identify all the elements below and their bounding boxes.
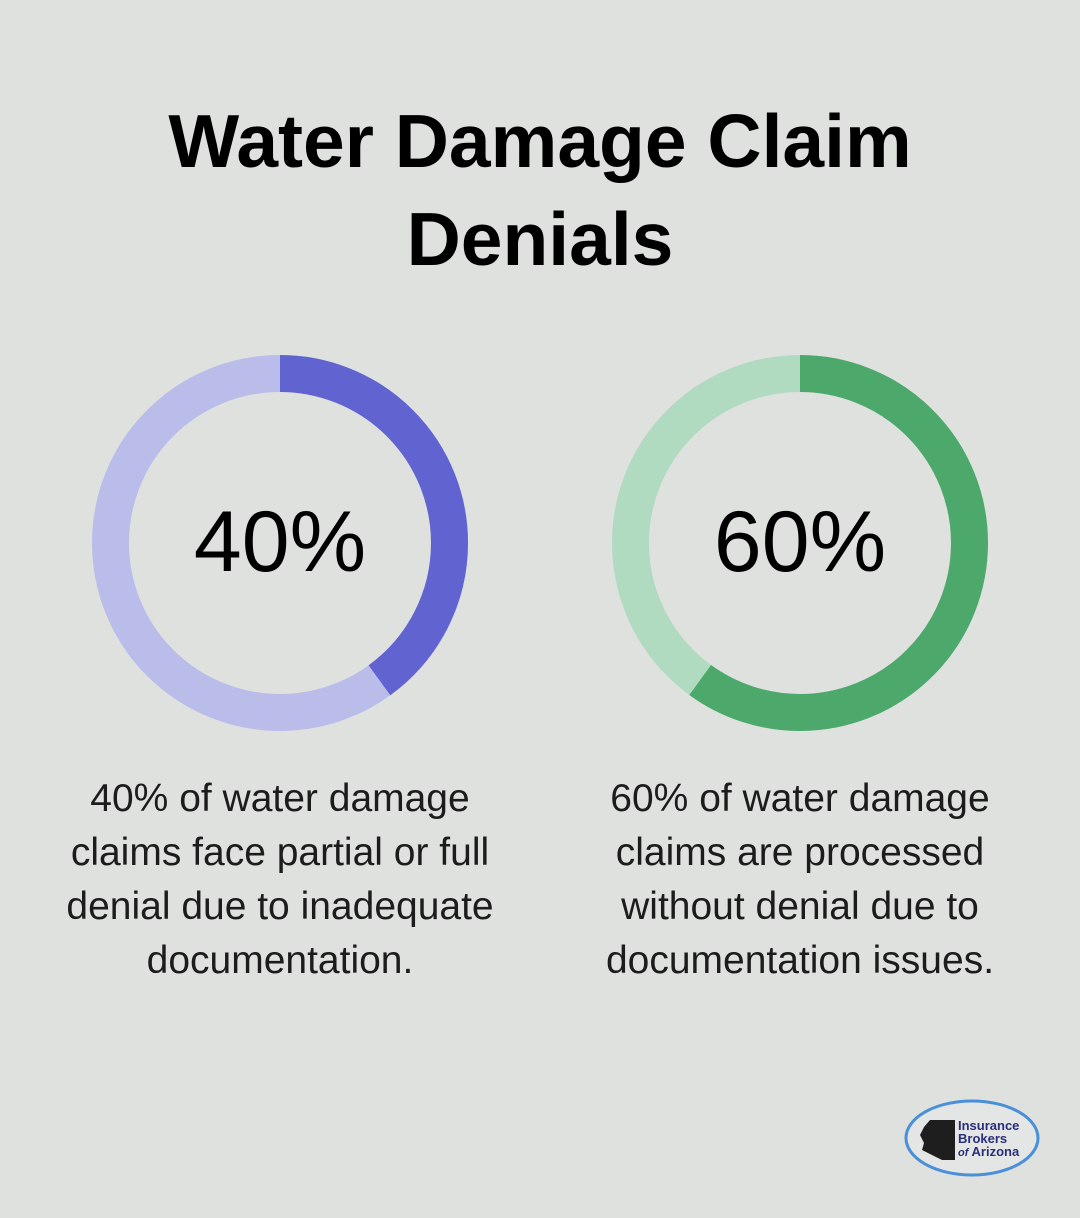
title: Water Damage Claim [168, 99, 912, 183]
text: left description: 40% of water damage [90, 777, 470, 820]
text: left description: denial due to inadequate [66, 885, 494, 928]
text: left description [66, 777, 494, 982]
logo: Insurance [958, 1118, 1019, 1133]
title [168, 99, 912, 281]
text: left description: claims face partial or full [71, 831, 489, 874]
donut: 40% [110, 374, 450, 712]
donut charts [92, 355, 988, 731]
text: right description [606, 777, 994, 982]
text: right description: without denial due to [621, 885, 979, 928]
text: left description: documentation. [147, 939, 413, 982]
text: right description: documentation issues. [606, 939, 994, 982]
text: right description: 60% of water damage [610, 777, 990, 820]
logo: Brokers [958, 1131, 1007, 1146]
logo: of Arizona [958, 1144, 1020, 1159]
title: Denials [407, 197, 673, 281]
donut: 60%: 60% [714, 494, 886, 590]
text: right description: claims are processed [616, 831, 984, 874]
logo [904, 1100, 1040, 1176]
donut: 40%: 40% [194, 494, 366, 590]
donut: 60% [630, 374, 970, 712]
